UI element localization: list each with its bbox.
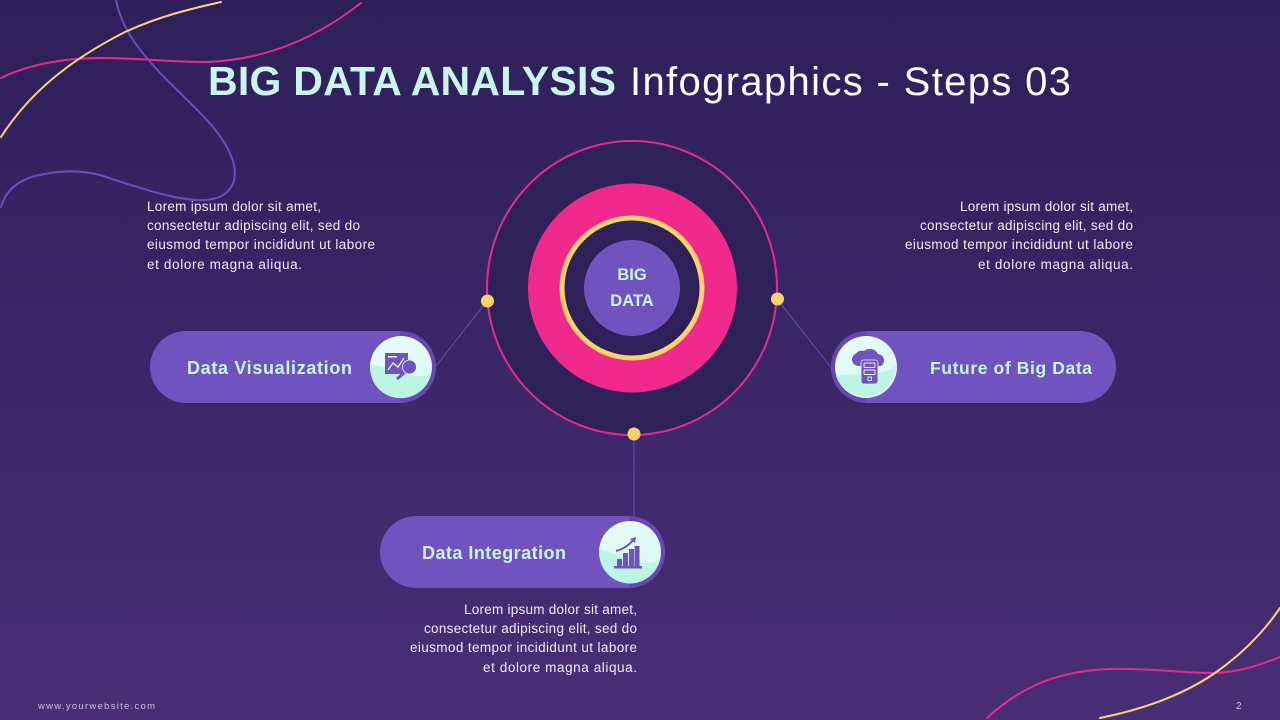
central big data diagram bbox=[487, 141, 777, 435]
pill: future of big data bbox=[831, 331, 1116, 403]
icon: chart presentation with magnifier bbox=[370, 336, 432, 398]
yellow ring bbox=[562, 218, 702, 358]
text block: right bbox=[905, 199, 1133, 272]
text block: bottom: eiusmod tempor incididunt ut labore bbox=[410, 640, 637, 655]
title: BIG DATA ANALYSIS bbox=[208, 58, 616, 104]
centre label: DATA bbox=[610, 292, 654, 310]
text block: right: et dolore magna aliqua. bbox=[978, 257, 1133, 272]
text block: left: eiusmod tempor incididunt ut labore bbox=[147, 237, 375, 252]
label: Future of Big Data bbox=[930, 358, 1092, 378]
pill: data integration bbox=[380, 516, 665, 588]
title: Infographics - Steps 03 bbox=[630, 60, 1071, 104]
pill: data visualization bbox=[150, 331, 436, 403]
text block: bottom: et dolore magna aliqua. bbox=[483, 660, 637, 675]
text block: left bbox=[147, 199, 375, 272]
text block: right: Lorem ipsum dolor sit amet, bbox=[960, 199, 1133, 214]
connector lines bbox=[436, 299, 833, 517]
text block: right: eiusmod tempor incididunt ut labore bbox=[905, 237, 1133, 252]
centre label: BIG bbox=[617, 266, 647, 284]
centre circle bbox=[584, 240, 680, 336]
icon: cloud server bbox=[835, 336, 897, 398]
text block: bottom: consectetur adipiscing elit, sed do bbox=[424, 621, 637, 636]
pink disc bbox=[528, 184, 737, 392]
decorative curves bottom right bbox=[987, 608, 1280, 718]
text block: left: consectetur adipiscing elit, sed do bbox=[147, 218, 360, 233]
icon: growth bar chart bbox=[599, 521, 661, 584]
outer ring bbox=[487, 141, 777, 435]
label: Data Integration bbox=[422, 543, 566, 563]
decorative curves top left bbox=[1, 0, 361, 207]
connector dots bbox=[481, 292, 784, 440]
text block: left: et dolore magna aliqua. bbox=[147, 257, 302, 272]
text block: bottom: Lorem ipsum dolor sit amet, bbox=[464, 602, 637, 617]
text block: left: Lorem ipsum dolor sit amet, bbox=[147, 199, 321, 214]
title bbox=[208, 58, 1071, 104]
text block: bottom bbox=[410, 602, 637, 675]
page number: 2 bbox=[1236, 701, 1242, 712]
label: Data Visualization bbox=[187, 358, 352, 378]
footer website: www.yourwebsite.com bbox=[37, 701, 155, 712]
text block: right: consectetur adipiscing elit, sed do bbox=[920, 218, 1133, 233]
centre label bbox=[610, 266, 654, 310]
